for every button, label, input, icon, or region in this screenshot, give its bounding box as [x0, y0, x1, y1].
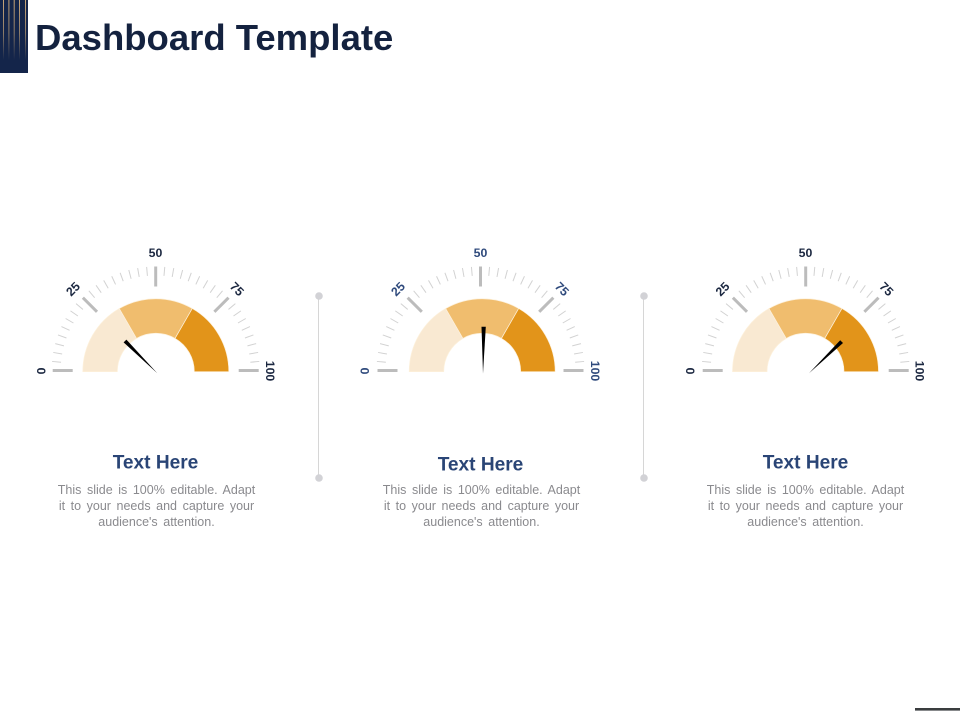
- gauge 3 scale labels: 75: [877, 279, 896, 299]
- gauge 2 scale labels: 75: [552, 279, 572, 299]
- caption 3 heading: Text Here: [763, 452, 848, 474]
- gauge 1 scale labels: 25: [63, 279, 83, 299]
- panel: gauge 2: [358, 246, 602, 381]
- gauge 2 scale labels: 100: [588, 361, 602, 381]
- gauge 2 needle: [482, 327, 486, 374]
- gauge 1 scale labels: 75: [227, 279, 247, 299]
- gauge 3 scale labels: 0: [684, 367, 698, 374]
- gauge 3 scale labels: [684, 246, 926, 381]
- footer bar: [915, 708, 960, 711]
- caption 2 heading: Text Here: [438, 454, 523, 476]
- panel: gauge 3: [684, 246, 926, 381]
- gauge 1 scale labels: [34, 246, 277, 381]
- gauge 2 scale labels: 0: [358, 367, 372, 374]
- gauge 1 coloured arc: [83, 299, 229, 372]
- gauge 3 needle: [809, 340, 843, 373]
- caption 3 body: audience's attention.: [747, 515, 864, 529]
- caption 1 body: [58, 483, 256, 529]
- caption 3: [707, 452, 905, 529]
- caption 2 body: [383, 483, 581, 529]
- caption 1 body: audience's attention.: [98, 515, 215, 529]
- caption 2: [383, 454, 581, 529]
- caption 3 body: it to your needs and capture your: [708, 499, 903, 513]
- gauge 1 scale labels: 50: [149, 246, 162, 260]
- caption 1: [58, 452, 256, 529]
- gauge 3 coloured arc: [732, 299, 878, 372]
- gauge 3 scale labels: 50: [799, 246, 812, 260]
- caption 1 body: This slide is 100% editable. Adapt: [58, 483, 256, 497]
- gauge 2 scale labels: [358, 246, 602, 381]
- divider 2: [640, 292, 648, 482]
- panel: gauge 1: [34, 246, 277, 381]
- gauge 1 scale labels: 0: [34, 367, 48, 374]
- header accent block: [0, 0, 28, 73]
- caption 1 body: it to your needs and capture your: [59, 499, 254, 513]
- gauge 3 scale labels: 25: [713, 279, 733, 299]
- gauge 1 tick scale: [52, 266, 259, 370]
- gauge 2 scale labels: 50: [474, 246, 487, 260]
- gauge 3 scale labels: 100: [912, 361, 926, 381]
- caption 2 body: it to your needs and capture your: [384, 499, 579, 513]
- caption 3 body: [707, 483, 905, 529]
- title: Dashboard Template: [35, 17, 393, 58]
- gauge 2 tick scale: [377, 266, 584, 370]
- divider 1: [315, 292, 323, 482]
- caption 2 body: audience's attention.: [423, 515, 540, 529]
- caption 1 heading: Text Here: [113, 452, 198, 474]
- gauge 2 scale labels: 25: [388, 279, 408, 299]
- gauge 1 needle: [124, 340, 157, 373]
- caption 3 body: This slide is 100% editable. Adapt: [707, 483, 905, 497]
- gauge 2 coloured arc: [409, 299, 555, 372]
- gauge 3 tick scale: [702, 266, 909, 370]
- gauge 1 scale labels: 100: [263, 361, 277, 381]
- caption 2 body: This slide is 100% editable. Adapt: [383, 483, 581, 497]
